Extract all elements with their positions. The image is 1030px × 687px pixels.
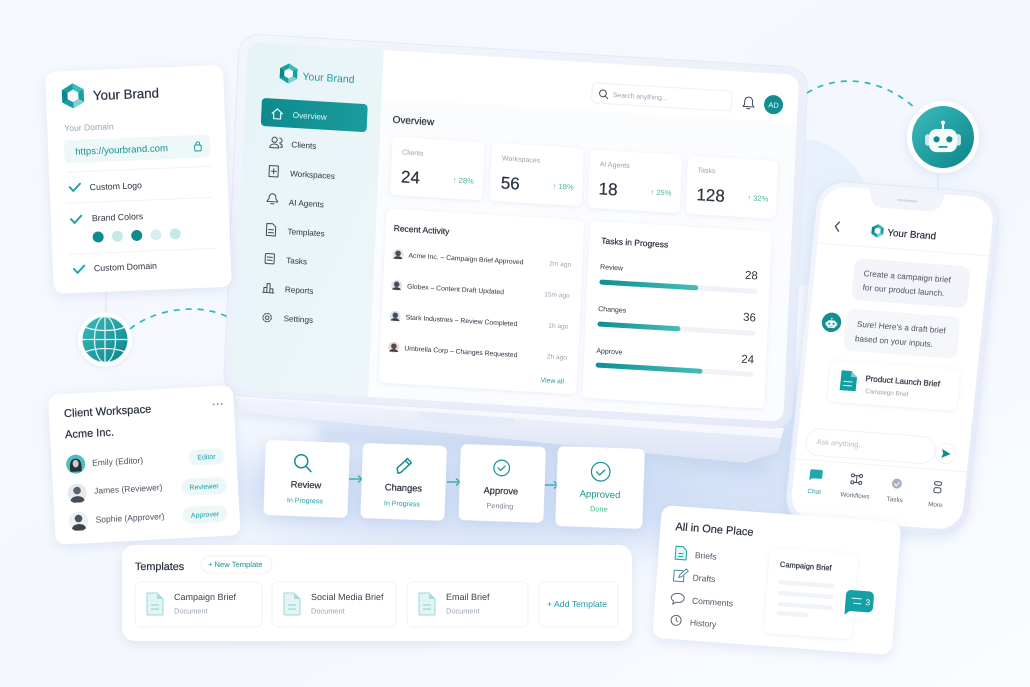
panel: recent activity — [379, 209, 584, 394]
icon: globe — [78, 312, 132, 366]
new template button: + New Template — [208, 560, 263, 569]
panel: all in one place — [652, 505, 901, 655]
activity row: Acme: 2m ago — [549, 260, 572, 269]
panel: tasks in progress: Tasks in Progress — [601, 236, 668, 250]
stat card: Workspaces: 56 — [500, 173, 520, 194]
nav item: Workspaces: Workspaces — [290, 169, 335, 181]
activity row: Globex: 15m ago — [544, 291, 570, 300]
item: History — [671, 615, 718, 629]
active nav item: Overview — [261, 98, 368, 132]
item: Drafts: Drafts — [692, 572, 716, 584]
icon: robot — [907, 101, 979, 173]
progress: Approve: 24 — [741, 354, 755, 366]
icon: pencil — [397, 458, 411, 474]
user message bubble: for our product launch. — [862, 283, 945, 298]
member: Sophie — [69, 504, 228, 531]
member: Emily — [66, 447, 225, 474]
workflow step: Review: Review — [291, 479, 322, 490]
stat card: Workspaces: ↑ 18% — [552, 182, 574, 192]
nav item: Templates: Templates — [287, 227, 325, 238]
stat card: Tasks: Tasks — [697, 166, 716, 175]
bot message bubble: Sure! Here's a draft brief — [857, 320, 947, 335]
stat card: Clients: Clients — [402, 148, 424, 158]
phone brand — [871, 224, 937, 242]
progress: Changes: 36 — [743, 312, 756, 324]
template: Social Media Brief: Social Media Brief — [311, 592, 384, 602]
panel: brand card — [45, 65, 232, 294]
stat card: Workspaces — [490, 143, 584, 206]
progress: Changes: Changes — [598, 305, 627, 315]
workflow step: Approved — [555, 446, 645, 529]
options menu — [213, 403, 223, 405]
client name: Acme Inc. — [65, 427, 114, 441]
add template button: + Add Template — [547, 599, 607, 609]
workflow step: Approved: Done — [590, 504, 608, 514]
comment count badge — [844, 590, 874, 617]
tab: Workflows — [840, 473, 872, 501]
arrow: changes to approve — [447, 478, 460, 486]
progress: Review — [599, 261, 758, 294]
connector: robot to phone — [937, 172, 939, 190]
panel: templates — [122, 545, 632, 641]
colour swatches — [92, 228, 181, 243]
activity row: Stark — [390, 310, 569, 332]
card title: All in One Place — [675, 521, 754, 539]
template: Email Brief: Email Brief — [446, 592, 490, 602]
stat card: AI Agents: 18 — [598, 179, 618, 199]
laptop base — [236, 392, 784, 463]
item: Drafts — [673, 568, 716, 584]
new template button — [201, 556, 272, 573]
nav item: Tasks: Tasks — [286, 256, 307, 266]
phone frame — [784, 180, 1000, 536]
add template button — [539, 582, 618, 627]
progress: Approve: Approve — [596, 348, 623, 356]
tab: Chat: Chat — [807, 488, 821, 496]
activity row: Acme — [392, 249, 572, 270]
member: Sophie: Sophie (Approver) — [95, 511, 165, 525]
search box — [592, 83, 732, 111]
domain input: https://yourbrand.com — [75, 143, 168, 158]
stat card: AI Agents: AI Agents — [600, 161, 630, 170]
phone screen — [789, 185, 995, 531]
workflow step: Review — [263, 440, 350, 518]
user avatar — [764, 95, 783, 115]
option: custom domain: Custom Domain — [94, 261, 157, 273]
bot message bubble — [843, 308, 961, 359]
workflow step: Changes: Changes — [385, 482, 423, 494]
templates heading: Templates — [135, 561, 185, 573]
laptop — [223, 33, 808, 463]
campaign brief preview: Campaign Brief — [780, 560, 833, 573]
bot message bubble: based on your inputs. — [855, 334, 934, 349]
template: Social Media Brief: Document — [311, 606, 345, 616]
icon: check circle — [591, 462, 610, 481]
sidebar — [232, 42, 384, 397]
activity row: Globex — [391, 280, 570, 301]
nav item: Settings — [263, 313, 313, 325]
option: brand colors — [71, 210, 181, 244]
progress: Review: 28 — [745, 270, 758, 282]
nav item: Reports: Reports — [285, 285, 314, 296]
domain label: Your Domain — [64, 121, 114, 133]
stat card: Tasks: 128 — [696, 185, 725, 206]
main screen area — [232, 42, 799, 422]
template: Social Media Brief — [272, 582, 396, 627]
brand name: Your Brand — [93, 85, 159, 103]
activity row: Stark: 1h ago — [548, 323, 569, 331]
workflow step: Approve — [458, 444, 546, 523]
option: brand colors: Brand Colors — [92, 211, 144, 223]
card title: Client Workspace — [64, 404, 152, 420]
nav item: Clients — [270, 137, 317, 151]
workflow step: Changes: In Progress — [384, 500, 420, 509]
tab: Chat — [807, 469, 823, 496]
activity row: Globex: Globex – Content Draft Updated — [407, 283, 504, 296]
document attachment card — [827, 360, 960, 411]
send button — [935, 443, 957, 464]
panel: client workspace — [48, 385, 241, 545]
arrow: approve to approved — [545, 482, 558, 488]
template: Campaign Brief: Document — [174, 606, 208, 616]
overview heading: Overview — [392, 115, 435, 128]
header bar — [380, 50, 799, 123]
activity row: Acme: Acme Inc. – Campaign Brief Approved — [408, 252, 524, 266]
message input: Ask anything... — [816, 437, 865, 450]
bell icon — [743, 97, 754, 109]
user message bubble — [851, 258, 971, 308]
search box: Search anything... — [613, 92, 668, 102]
tab: Workflows: Workflows — [840, 491, 870, 501]
user message bubble: Create a campaign brief — [863, 269, 952, 285]
tab: Tasks — [886, 478, 905, 504]
stat card: Clients — [390, 137, 485, 200]
stat card: AI Agents: ↑ 25% — [650, 187, 672, 198]
template: Email Brief — [407, 582, 528, 627]
stat card: Tasks: ↑ 32% — [747, 193, 769, 204]
stat card: AI Agents — [588, 150, 682, 213]
tab: Tasks: Tasks — [886, 496, 903, 504]
activity row: Umbrella — [388, 341, 568, 363]
nav item: Tasks — [265, 253, 307, 266]
domain input — [64, 134, 211, 163]
item: History: History — [690, 617, 717, 629]
workflow step: Approve: Approve — [483, 485, 518, 497]
phone brand: Your Brand — [887, 228, 936, 242]
stat card: Workspaces: Workspaces — [502, 154, 541, 165]
icon: magnifier — [294, 455, 312, 472]
laptop bezel — [223, 33, 808, 429]
workflow step: Approve: Pending — [486, 501, 513, 511]
active nav item: Overview: Overview — [293, 111, 327, 122]
bot avatar — [821, 312, 842, 333]
connector: globe to laptop — [130, 309, 230, 329]
panel: recent activity: Recent Activity — [394, 223, 450, 236]
item: Comments — [671, 593, 734, 608]
panel: tasks in progress — [582, 221, 772, 409]
member: James — [67, 476, 227, 503]
document attachment card: Campaign Brief — [865, 388, 909, 398]
option: custom logo — [69, 180, 142, 193]
nav item: AI Agents — [267, 193, 324, 209]
item: Comments: Comments — [692, 595, 733, 608]
view all link: View all — [540, 377, 565, 386]
member: Emily: Emily (Editor) — [92, 455, 143, 468]
nav item: Templates — [266, 223, 325, 239]
stat card: Clients: 24 — [401, 167, 420, 188]
message input — [805, 428, 936, 464]
connector: laptop to robot — [807, 81, 917, 110]
icon: check circle — [494, 460, 510, 476]
back chevron — [835, 221, 840, 232]
document attachment card: Product Launch Brief — [865, 374, 941, 389]
progress: Approve — [596, 345, 755, 377]
comment count badge: 3 — [865, 597, 871, 608]
activity row: Stark: Stark Industries – Review Completed — [406, 314, 518, 328]
connector: brand card to globe — [105, 292, 107, 316]
progress: Changes — [597, 303, 756, 336]
sidebar brand — [279, 63, 355, 87]
member: James: Reviewer — [189, 482, 219, 492]
workflow step: Review: In Progress — [287, 497, 323, 506]
arrow: review to changes — [349, 476, 362, 482]
workflow step: Approved: Approved — [580, 489, 621, 501]
stat card: Tasks — [686, 156, 778, 219]
template: Email Brief: Document — [446, 606, 480, 616]
item: Briefs: Briefs — [695, 550, 717, 562]
member: Emily: Editor — [197, 453, 216, 462]
nav item: Workspaces — [269, 165, 335, 181]
campaign brief preview — [764, 548, 858, 639]
member: Sophie: Approver — [191, 511, 220, 520]
sidebar brand: Your Brand — [302, 71, 355, 86]
laptop screen — [223, 33, 808, 429]
member: James: James (Reviewer) — [94, 482, 163, 496]
template: Campaign Brief — [135, 582, 262, 627]
option: custom logo: Custom Logo — [89, 180, 142, 192]
item: Briefs — [675, 546, 717, 562]
workflow step: Changes — [360, 443, 447, 521]
activity row: Umbrella: Umbrella Corp – Changes Requested — [404, 345, 518, 359]
user avatar: AD — [768, 100, 780, 110]
nav item: Settings: Settings — [283, 314, 313, 325]
nav item: Reports — [263, 283, 314, 296]
background glow behind laptop and phone — [220, 138, 910, 560]
nav item: AI Agents: AI Agents — [289, 198, 324, 209]
activity row: Umbrella: 2h ago — [547, 353, 567, 362]
brand logo — [62, 83, 84, 109]
tab: More: More — [928, 501, 943, 509]
tab: More — [928, 481, 945, 509]
template: Campaign Brief: Campaign Brief — [174, 592, 237, 602]
nav item: Clients: Clients — [291, 140, 317, 151]
phone notch — [868, 189, 944, 212]
phone — [784, 180, 1000, 536]
stat card: Clients: ↑ 28% — [453, 176, 474, 186]
progress: Review: Review — [600, 263, 624, 272]
